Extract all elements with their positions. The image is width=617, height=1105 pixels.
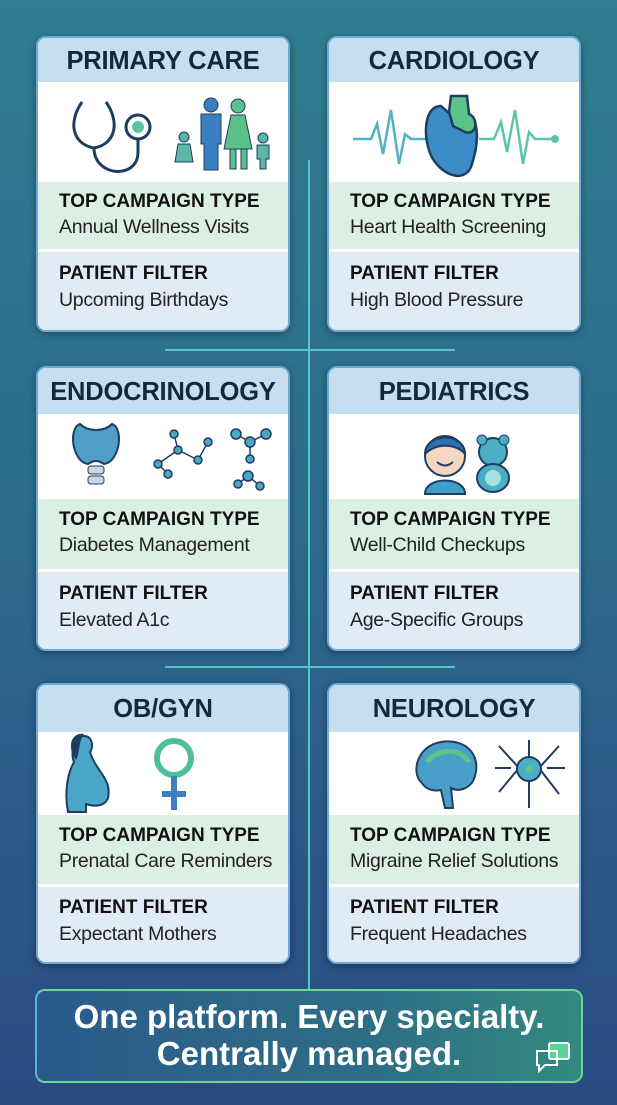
card: endocrinology bbox=[36, 366, 290, 651]
icon: pregnant woman and female symbol bbox=[38, 732, 288, 815]
campaign type: TOP CAMPAIGN TYPE bbox=[59, 509, 260, 530]
heading bbox=[329, 38, 579, 82]
patient filter bbox=[329, 252, 579, 330]
campaign type: Migraine Relief Solutions bbox=[350, 850, 558, 872]
campaign type: TOP CAMPAIGN TYPE bbox=[59, 825, 260, 846]
heading bbox=[38, 38, 288, 82]
patient filter: Upcoming Birthdays bbox=[59, 289, 228, 311]
icon: chat bubbles bbox=[536, 1042, 570, 1073]
patient filter bbox=[329, 572, 579, 649]
campaign type bbox=[38, 499, 288, 569]
icon: brain and neuron bbox=[329, 732, 579, 815]
icon: stethoscope and family bbox=[38, 82, 288, 182]
campaign type bbox=[38, 815, 288, 884]
patient filter bbox=[38, 572, 288, 649]
campaign type: TOP CAMPAIGN TYPE bbox=[350, 509, 551, 530]
patient filter: PATIENT FILTER bbox=[59, 583, 208, 604]
heading bbox=[329, 368, 579, 414]
campaign type: Diabetes Management bbox=[59, 534, 250, 556]
icon: heart with ECG bbox=[329, 82, 579, 182]
patient filter: PATIENT FILTER bbox=[350, 263, 499, 284]
banner: tagline bbox=[35, 989, 583, 1083]
card: cardiology bbox=[327, 36, 581, 332]
heading bbox=[38, 368, 288, 414]
heading: NEUROLOGY bbox=[373, 695, 535, 723]
heading: OB/GYN bbox=[113, 695, 213, 723]
heading: PEDIATRICS bbox=[379, 378, 529, 406]
campaign type: Prenatal Care Reminders bbox=[59, 850, 272, 872]
card: pediatrics bbox=[327, 366, 581, 651]
patient filter bbox=[38, 887, 288, 962]
patient filter: High Blood Pressure bbox=[350, 289, 523, 311]
campaign type bbox=[38, 182, 288, 249]
patient filter: Frequent Headaches bbox=[350, 923, 527, 945]
banner: tagline: One platform. Every specialty. bbox=[74, 998, 544, 1035]
banner: tagline: Centrally managed. bbox=[157, 1035, 461, 1072]
patient filter: Expectant Mothers bbox=[59, 923, 216, 945]
campaign type: Annual Wellness Visits bbox=[59, 216, 249, 238]
patient filter bbox=[329, 887, 579, 962]
icon: thyroid and molecules bbox=[38, 414, 288, 499]
patient filter: PATIENT FILTER bbox=[350, 897, 499, 918]
card: ob/gyn bbox=[36, 683, 290, 964]
campaign type: Heart Health Screening bbox=[350, 216, 546, 238]
campaign type: TOP CAMPAIGN TYPE bbox=[59, 191, 260, 212]
heading bbox=[38, 685, 288, 732]
icon: child and teddy bear bbox=[329, 414, 579, 499]
card: neurology bbox=[327, 683, 581, 964]
campaign type: TOP CAMPAIGN TYPE bbox=[350, 191, 551, 212]
heading: ENDOCRINOLOGY bbox=[50, 378, 276, 406]
campaign type: TOP CAMPAIGN TYPE bbox=[350, 825, 551, 846]
campaign type bbox=[329, 499, 579, 569]
heading bbox=[329, 685, 579, 732]
patient filter: PATIENT FILTER bbox=[350, 583, 499, 604]
patient filter: PATIENT FILTER bbox=[59, 263, 208, 284]
heading: PRIMARY CARE bbox=[66, 47, 260, 75]
patient filter: PATIENT FILTER bbox=[59, 897, 208, 918]
patient filter bbox=[38, 252, 288, 330]
campaign type bbox=[329, 182, 579, 249]
patient filter: Elevated A1c bbox=[59, 609, 169, 631]
campaign type bbox=[329, 815, 579, 884]
card: primary care bbox=[36, 36, 290, 332]
campaign type: Well-Child Checkups bbox=[350, 534, 525, 556]
heading: CARDIOLOGY bbox=[369, 47, 539, 75]
patient filter: Age-Specific Groups bbox=[350, 609, 523, 631]
